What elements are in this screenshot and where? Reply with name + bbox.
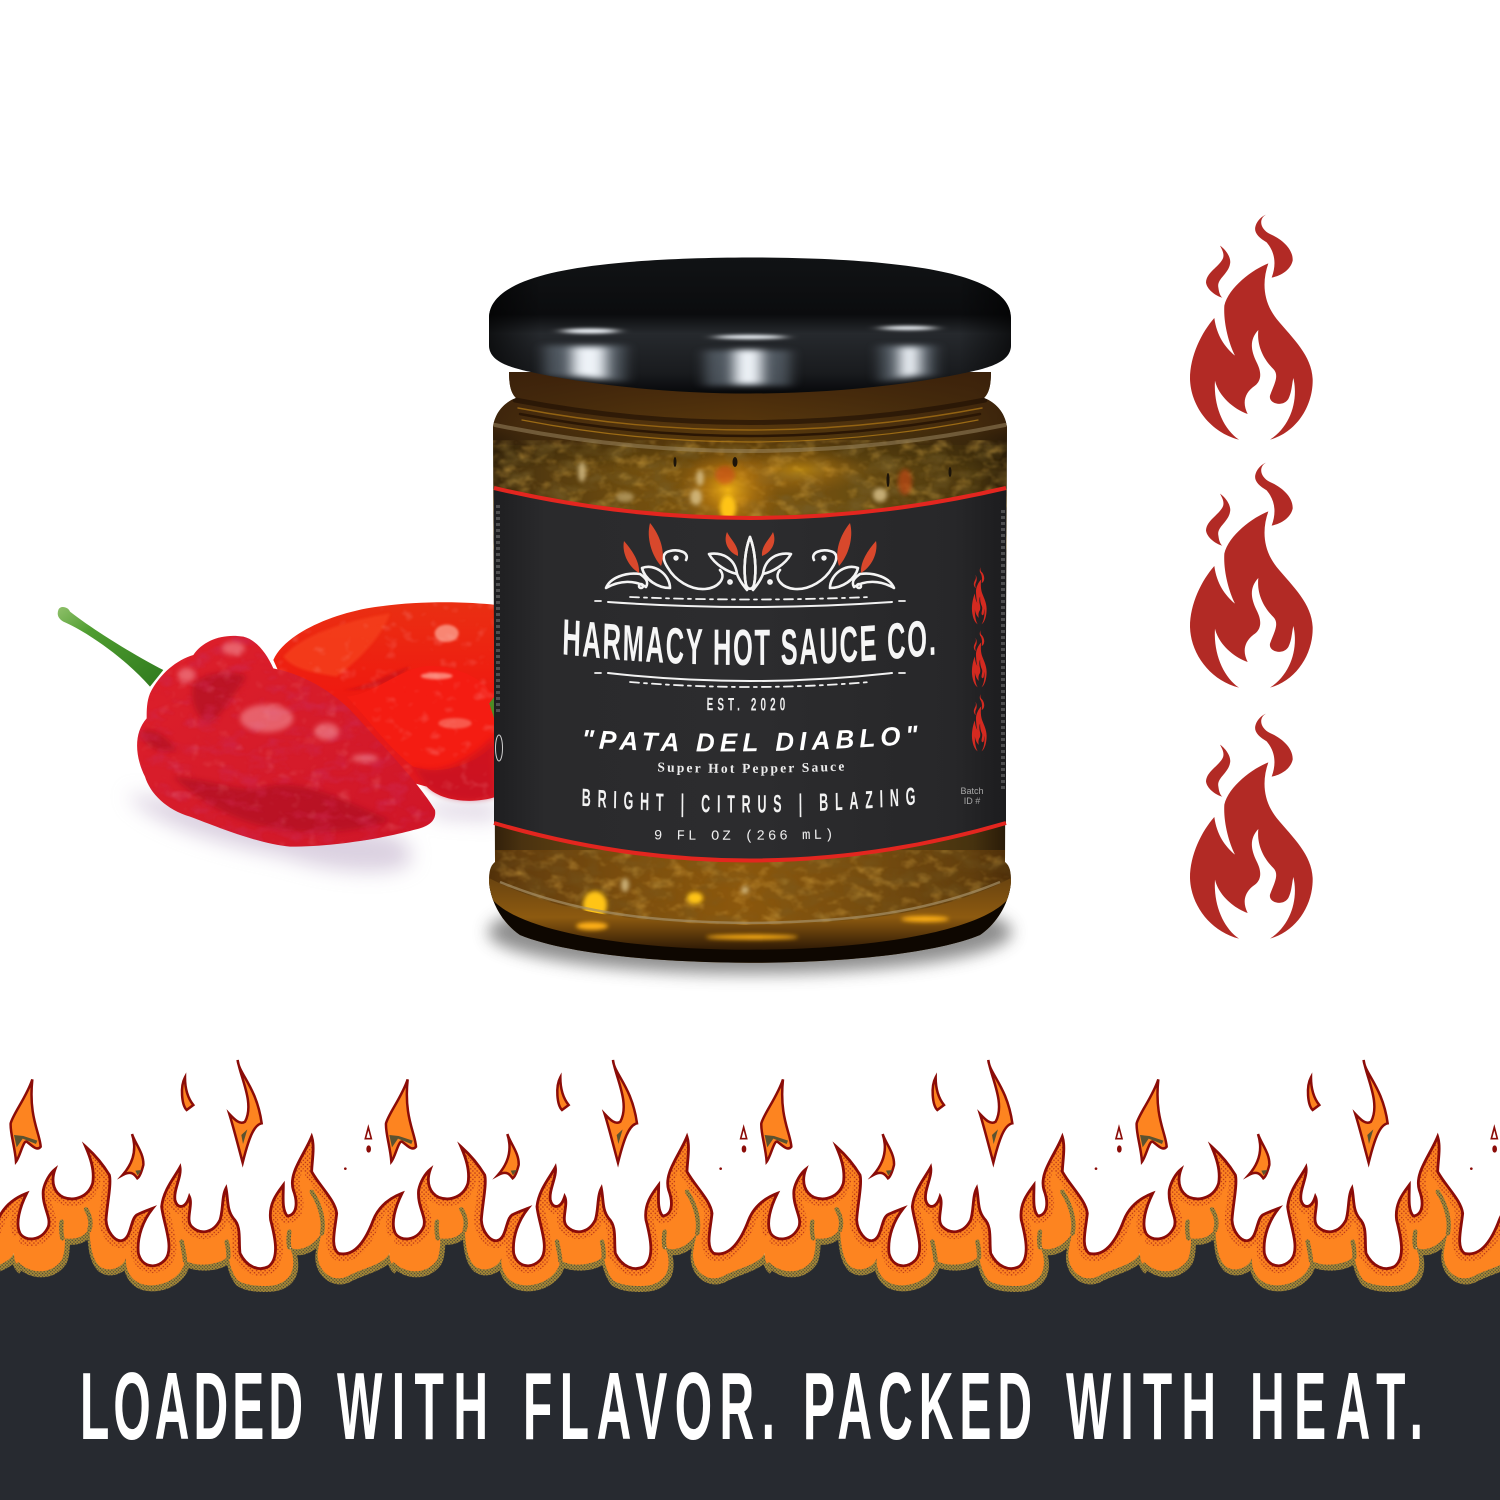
pepper stem — [58, 607, 163, 687]
ornament — [606, 523, 894, 590]
neck threads — [495, 400, 1005, 451]
lower divider — [595, 673, 905, 687]
jar shadow — [488, 890, 1012, 974]
heat flame 3 — [1190, 714, 1313, 939]
flavor notes: BRIGHT | CITRUS | BLAZING — [582, 788, 915, 818]
product name: "PATA DEL DIABLO" — [584, 726, 918, 752]
product descriptor: Super Hot Pepper Sauce — [658, 762, 844, 776]
label — [494, 486, 1006, 862]
flame border — [0, 1060, 1500, 1288]
batch id: Batch — [960, 786, 984, 796]
heat flame 2 — [1190, 463, 1313, 688]
net volume: 9 FL OZ (266 mL) — [654, 828, 831, 843]
tagline — [80, 1353, 1423, 1461]
established year: EST. 2020 — [707, 698, 785, 711]
tagline: PACKED — [803, 1353, 1032, 1461]
batch id: ID # — [964, 796, 980, 806]
label background — [494, 488, 1006, 860]
back pepper — [273, 600, 497, 807]
tagline: HEAT. — [1250, 1353, 1423, 1461]
round mark — [496, 735, 502, 761]
heat flame 1 — [1190, 215, 1313, 440]
tagline: FLAVOR. — [523, 1353, 775, 1461]
jar base — [489, 885, 1011, 963]
front pepper — [133, 633, 440, 850]
batch id — [960, 786, 984, 806]
tagline: WITH — [1066, 1353, 1216, 1461]
tagline: LOADED — [80, 1353, 303, 1461]
pepper photo — [58, 600, 497, 872]
lid — [489, 258, 1011, 394]
bottom rim — [489, 878, 1011, 950]
jar — [489, 258, 1011, 963]
upper divider — [595, 597, 905, 607]
tagline: WITH — [337, 1353, 488, 1461]
dark footer band — [0, 1227, 1500, 1500]
heat level flames — [1190, 215, 1313, 939]
side fine print — [498, 505, 1003, 790]
jar glass with sauce — [485, 365, 1015, 975]
pepper shadow — [127, 793, 497, 872]
sauce flecks — [578, 462, 887, 894]
label red bands — [494, 488, 1006, 860]
company name: HARMACY HOT SAUCE CO. — [564, 619, 934, 666]
label heat flames — [972, 567, 987, 751]
